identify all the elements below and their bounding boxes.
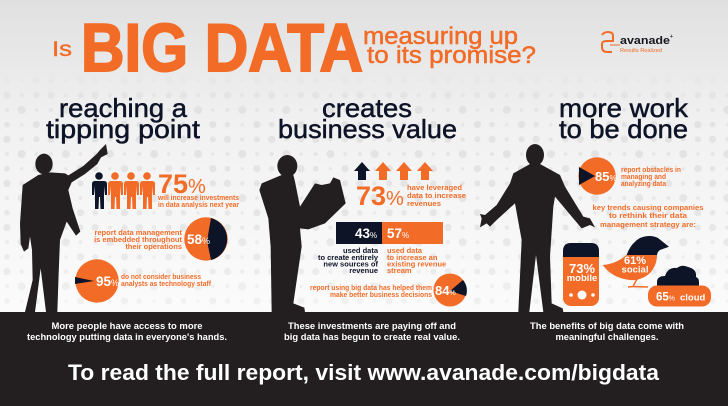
footer caption: column two <box>284 321 460 343</box>
footer caption: column one: More people have access to more <box>52 321 202 332</box>
footer caption: column three <box>530 321 684 343</box>
footer band <box>0 312 728 406</box>
stat: 73% arrows: have leveraged <box>407 183 462 192</box>
stat: 95% pie: do not consider business <box>121 272 201 281</box>
stat: 73% arrows: data to increase <box>407 191 466 200</box>
stat: 58% pie: their operations <box>125 242 182 251</box>
title: Is <box>52 38 72 61</box>
stat: 58% pie: 58% <box>187 232 210 247</box>
icon: mobile 73%: mobile <box>567 273 597 284</box>
avanade logo: + <box>670 34 673 40</box>
section heading: reaching a tipping point: reaching a <box>59 93 188 123</box>
icon: social bird 61% <box>603 236 669 287</box>
section heading: reaching a tipping point: tipping point <box>46 114 201 144</box>
stat: 58% pie: report data management <box>94 228 182 237</box>
stat: 85% pie <box>578 157 681 195</box>
stat: 85% pie: 85% <box>595 169 617 184</box>
call to action: To read the full report, visit www.avanade.com/bigdata <box>68 360 660 385</box>
section heading: more work to be done <box>559 93 689 144</box>
icon: social bird 61%: social <box>622 264 648 276</box>
stat: 73% arrows <box>354 162 466 211</box>
icon: cloud 65% <box>648 266 711 306</box>
silhouette: man with arms out <box>480 144 595 312</box>
title <box>52 10 536 86</box>
stat: 43% / 57% split bar: new sources of <box>323 260 378 268</box>
stat: 84% pie: make better business decisions <box>330 290 432 299</box>
key trends text: management strategy are: <box>600 220 696 229</box>
footer caption: column three: The benefits of big data come with <box>530 321 684 332</box>
avanade logo <box>602 32 673 54</box>
stat: 75% people icons: will increase investments <box>157 193 239 202</box>
key trends text: key trends causing companies <box>592 203 704 212</box>
footer caption: column one: technology putting data in everyone's hands. <box>27 332 227 343</box>
stat: 43% / 57% split bar: to increase an <box>387 253 438 262</box>
footer caption: column three: meaningful challenges. <box>556 332 658 343</box>
stat: 84% pie: report using big data has helped them <box>310 283 432 292</box>
stat: 75% people icons <box>92 169 239 209</box>
stat: 95% pie: 95% <box>96 274 119 289</box>
icon: mobile 73%: 73% <box>569 261 595 276</box>
stat: 43% / 57% split bar: stream <box>387 266 412 275</box>
section heading: creates business value: creates <box>322 93 412 123</box>
silhouette: man pointing upward <box>20 144 108 312</box>
stat: 43% / 57% split bar: 57% <box>387 226 409 241</box>
stat: 73% arrows: 73% <box>356 181 404 211</box>
stat: 73% arrows: revenues <box>407 199 441 208</box>
section heading: more work to be done: more work <box>559 93 689 123</box>
stat: 43% / 57% split bar: existing revenue <box>387 260 446 268</box>
section heading: creates business value <box>278 93 457 144</box>
stat: 85% pie: managing and <box>621 172 666 181</box>
key trends text: to rethink their data <box>609 211 688 220</box>
silhouette: man reading a book <box>259 155 346 312</box>
title: BIG DATA <box>81 10 363 86</box>
avanade logo: avanade <box>620 35 670 47</box>
stat: 58% pie <box>94 217 228 261</box>
stat: 95% pie: analysts as technology staff <box>121 279 211 288</box>
stat: 43% / 57% split bar: 43% <box>355 226 377 241</box>
title: to its promise? <box>367 42 536 69</box>
stat: 95% pie <box>75 259 211 303</box>
stat: 43% / 57% split bar: to create entirely <box>318 253 379 262</box>
stat: 43% / 57% split bar: used data <box>387 246 423 255</box>
key trends text <box>592 203 704 229</box>
icon: cloud 65%: 65% <box>656 292 675 304</box>
stat: 85% pie: analyzing data <box>621 179 667 188</box>
stat: 43% / 57% split bar: used data <box>343 246 379 255</box>
icon: social bird 61%: 61% <box>624 255 646 267</box>
section heading: more work to be done: to be done <box>559 114 688 144</box>
stat: 75% people icons: 75% <box>158 169 206 199</box>
avanade logo: Results Realized <box>620 48 662 54</box>
footer caption: column one <box>27 321 227 343</box>
footer caption: column two: big data has begun to create real value. <box>284 332 460 343</box>
section heading: creates business value: business value <box>278 114 457 144</box>
title: measuring up <box>363 23 518 50</box>
stat: 43% / 57% split bar: revenue <box>349 266 378 275</box>
stat: 84% pie: 84% <box>435 283 456 298</box>
stat: 75% people icons: in data analysis next year <box>158 200 239 209</box>
section heading: reaching a tipping point <box>46 93 201 144</box>
icon: cloud 65%: cloud <box>680 292 706 304</box>
stat: 84% pie <box>310 274 467 306</box>
stat: 58% pie: is embedded throughout <box>94 235 182 244</box>
stat: 43% / 57% split bar <box>318 222 446 275</box>
footer caption: column two: These investments are paying off and <box>288 321 456 332</box>
icon: mobile 73% <box>563 243 599 306</box>
stat: 85% pie: report obstacles in <box>621 165 681 174</box>
